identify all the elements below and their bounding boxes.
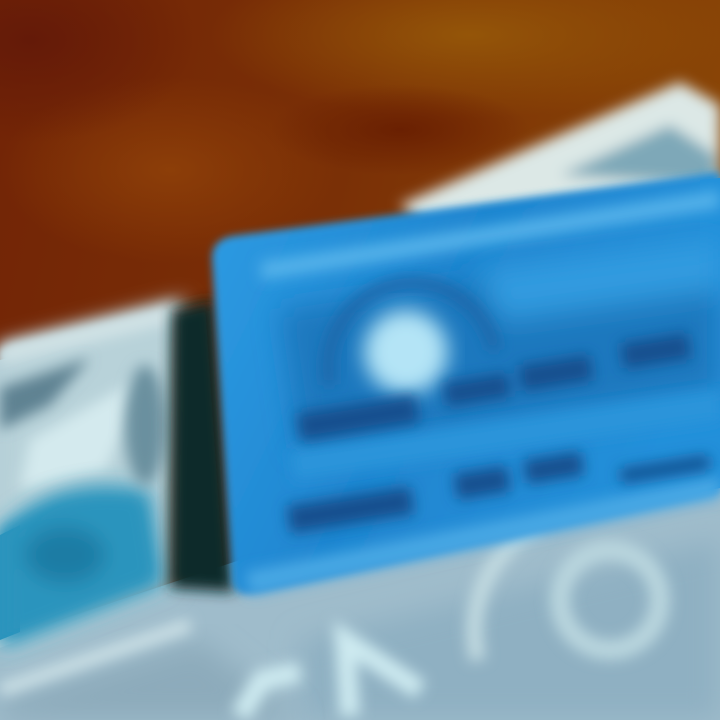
- left banknote: [0, 298, 185, 660]
- card top highlight: [260, 190, 720, 280]
- dark shadow beside the card: [170, 300, 234, 592]
- card body: [212, 172, 720, 594]
- card bottom edge: [245, 390, 720, 594]
- left banknote highlight: [20, 372, 150, 490]
- white banknote behind the card: [400, 82, 720, 240]
- left banknote teal base: [0, 505, 150, 632]
- left banknote top highlight band: [0, 303, 175, 364]
- left banknote grey marks: [0, 358, 165, 485]
- banknotes at the bottom: [0, 460, 720, 720]
- left banknote teal patch: [0, 485, 165, 650]
- card number lettering: [287, 451, 710, 534]
- centurion medallion dome: [364, 310, 448, 394]
- credit card: [212, 172, 720, 594]
- card name lettering: [297, 333, 691, 441]
- card right edge fill: [700, 178, 720, 492]
- left banknote base: [0, 312, 165, 630]
- centurion medallion ring: [328, 283, 495, 385]
- banknote engraved details: [0, 525, 660, 716]
- card dark band: [280, 240, 720, 450]
